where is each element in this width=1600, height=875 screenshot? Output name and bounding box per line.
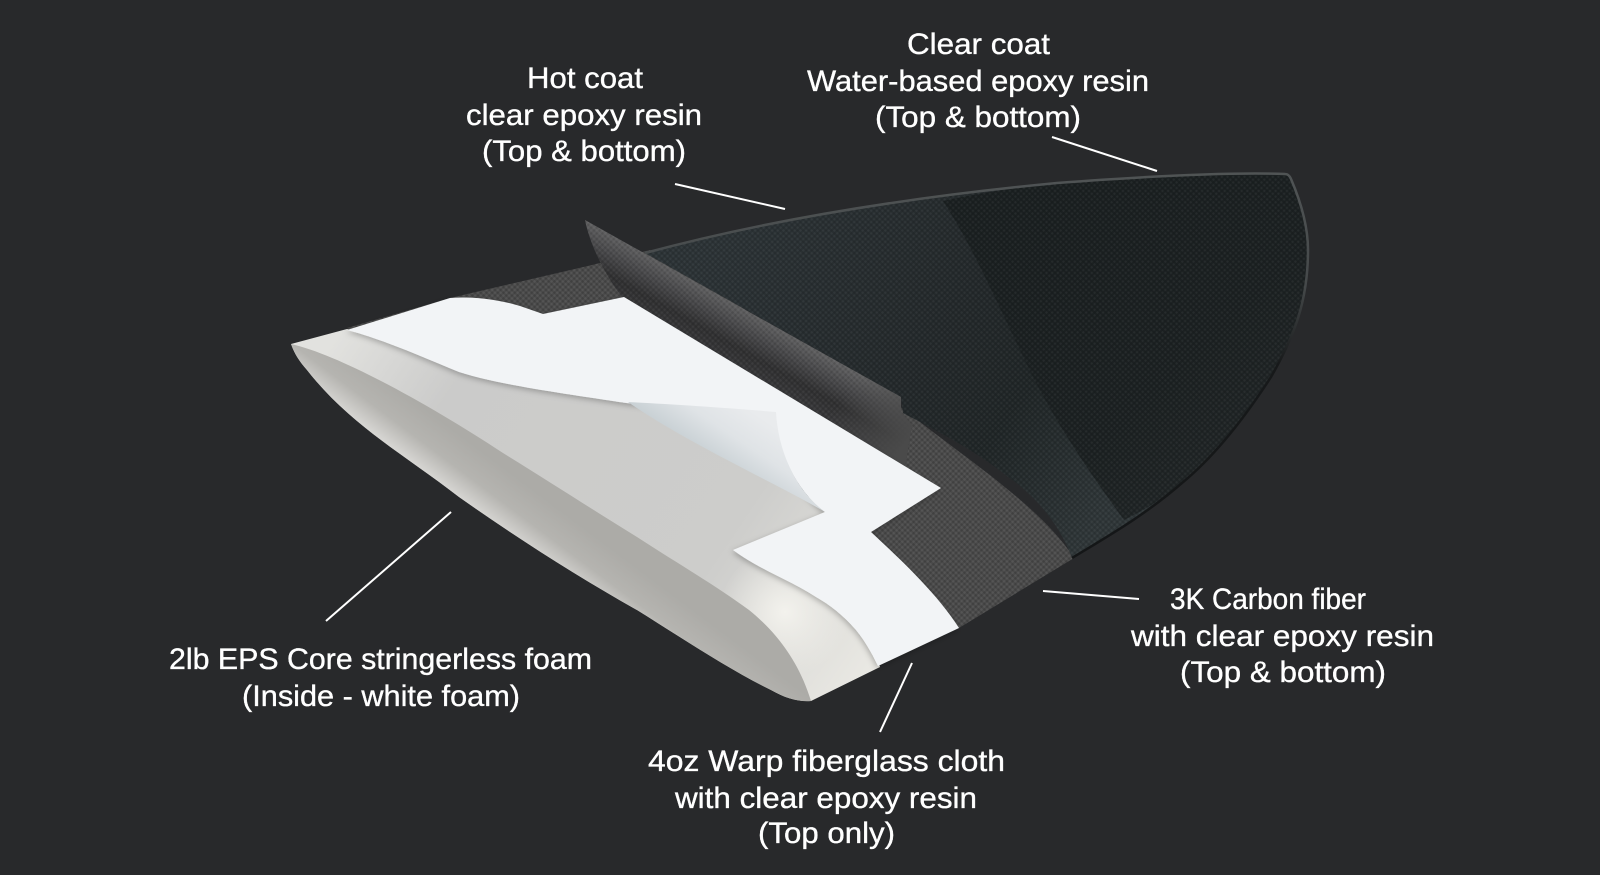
- label: EPS core: (Inside - white foam): [242, 680, 520, 713]
- label: clear coat: Water-based epoxy resin: [807, 65, 1149, 98]
- label: hot coat: [466, 62, 702, 168]
- label: fiberglass cloth: with clear epoxy resin: [674, 782, 977, 815]
- foam highlight: [700, 530, 880, 701]
- label: hot coat: Hot coat: [527, 62, 644, 95]
- leader line: EPS core: [326, 512, 451, 621]
- surfboard cross-section illustration: [291, 173, 1308, 701]
- layer: clear coat water-based epoxy: [943, 173, 1308, 520]
- layer: 3K carbon fiber: [347, 250, 1074, 628]
- label: clear coat: Clear coat: [907, 28, 1051, 61]
- label: 3K carbon fiber: 3K Carbon fiber: [1170, 583, 1366, 616]
- leader line: fiberglass: [880, 663, 912, 732]
- label: fiberglass cloth: 4oz Warp fiberglass cloth: [648, 745, 1005, 778]
- layer: hot coat clear epoxy: [645, 173, 1308, 558]
- label: EPS core: [169, 643, 592, 713]
- label: hot coat: clear epoxy resin: [466, 99, 702, 132]
- label: 3K carbon fiber: [1130, 583, 1434, 689]
- layer: peeled carbon flap: [585, 220, 912, 468]
- coat rim: [645, 173, 1308, 558]
- label: EPS core: 2lb EPS Core stringerless foam: [169, 643, 592, 676]
- label: 3K carbon fiber: (Top & bottom): [1180, 656, 1386, 689]
- layer: foam core top surface: [291, 329, 880, 701]
- leader line: carbon fiber: [1043, 591, 1139, 599]
- leader line: clear coat: [1052, 137, 1157, 171]
- label: 3K carbon fiber: with clear epoxy resin: [1130, 620, 1434, 653]
- layer: foam core side wall: [291, 344, 811, 701]
- layer: 4oz warp fiberglass cloth: [347, 297, 959, 666]
- label: hot coat: (Top & bottom): [482, 135, 686, 168]
- label: clear coat: (Top & bottom): [875, 101, 1081, 134]
- fiberglass peeled curl: [628, 402, 825, 512]
- label: fiberglass cloth: (Top only): [758, 817, 895, 850]
- label: clear coat: [807, 28, 1149, 134]
- leader line: hot coat: [675, 184, 785, 209]
- label: fiberglass cloth: [648, 745, 1005, 850]
